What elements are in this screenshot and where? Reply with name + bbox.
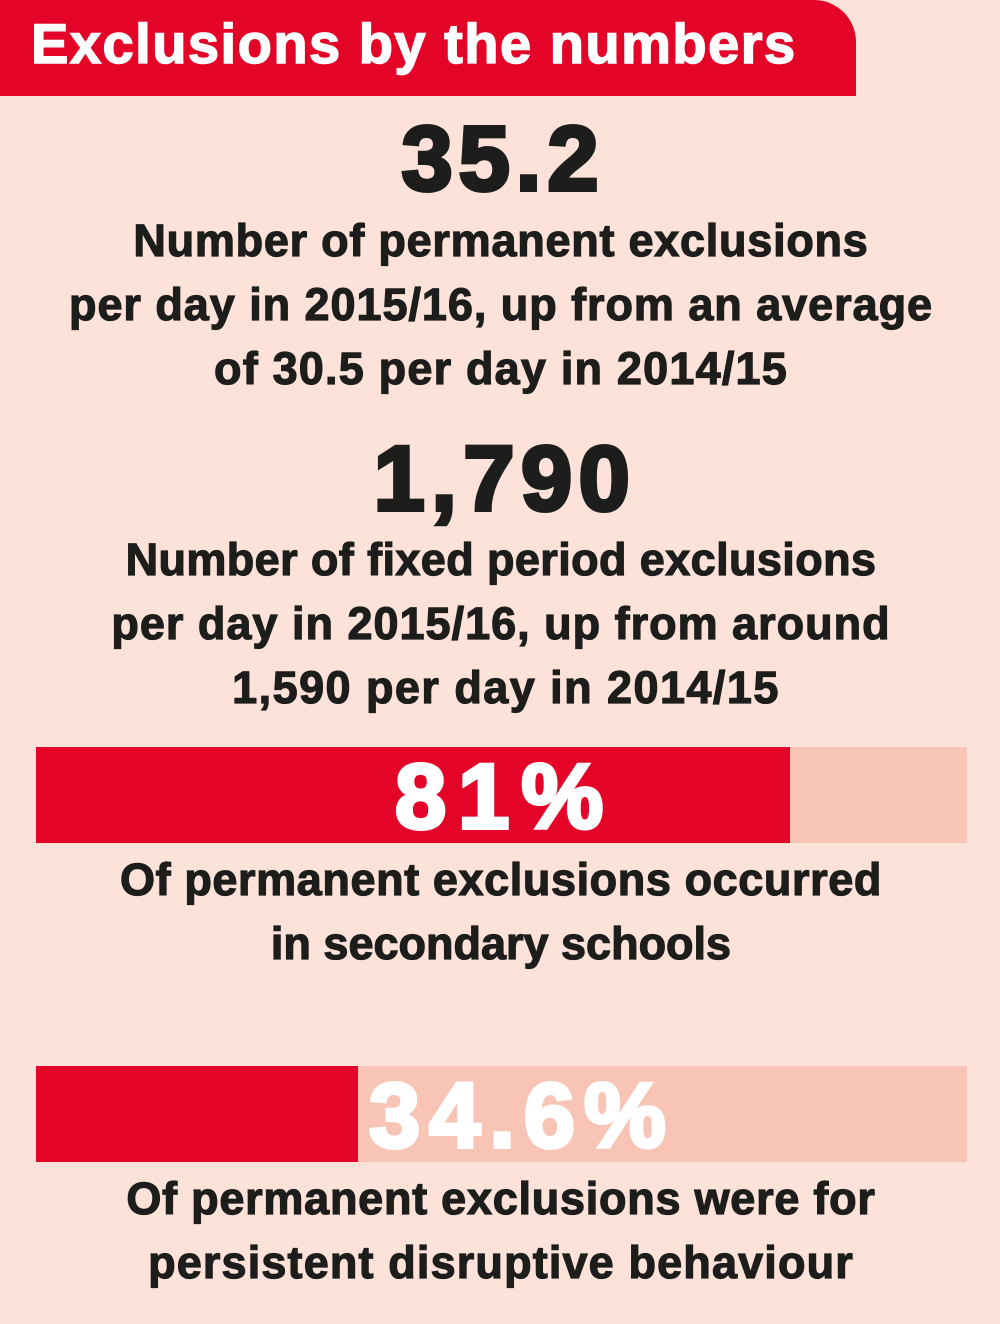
stat: 1,790: 1,790 [374, 428, 636, 530]
title banner [0, 0, 856, 96]
stat: 81%: 81% [395, 746, 615, 848]
text: persistent disruptive behaviour: persistent disruptive behaviour [148, 1237, 854, 1288]
text: fixed period exclusions per day [111, 534, 891, 714]
text: fixed period exclusions per day: 1,590 per day in 2014/15 [232, 662, 780, 713]
bar fill [36, 1066, 358, 1162]
title: Exclusions by the numbers [31, 12, 797, 75]
text: secondary schools [120, 854, 882, 970]
bar: 81% [36, 747, 967, 843]
text: fixed period exclusions per day: per day in 2015/16, up from around [111, 598, 891, 649]
bar: 34.6% [36, 1066, 967, 1162]
stat: 35.2: 35.2 [401, 108, 605, 210]
text: fixed period exclusions per day: Number of fixed period exclusions [126, 534, 876, 585]
bar fill [36, 747, 790, 843]
text: permanent exclusions per day [69, 215, 933, 394]
text: secondary schools: Of permanent exclusions occurred [120, 854, 882, 905]
text: permanent exclusions per day: Number of permanent exclusions [133, 215, 869, 266]
text: secondary schools: in secondary schools [271, 918, 731, 969]
text: persistent disruptive behaviour [126, 1173, 876, 1288]
text: persistent disruptive behaviour: Of permanent exclusions were for [126, 1173, 876, 1224]
text: permanent exclusions per day: of 30.5 per day in 2014/15 [214, 343, 788, 394]
text: permanent exclusions per day: per day in 2015/16, up from an average [69, 279, 933, 330]
stat: 34.6%: 34.6% [369, 1065, 675, 1167]
